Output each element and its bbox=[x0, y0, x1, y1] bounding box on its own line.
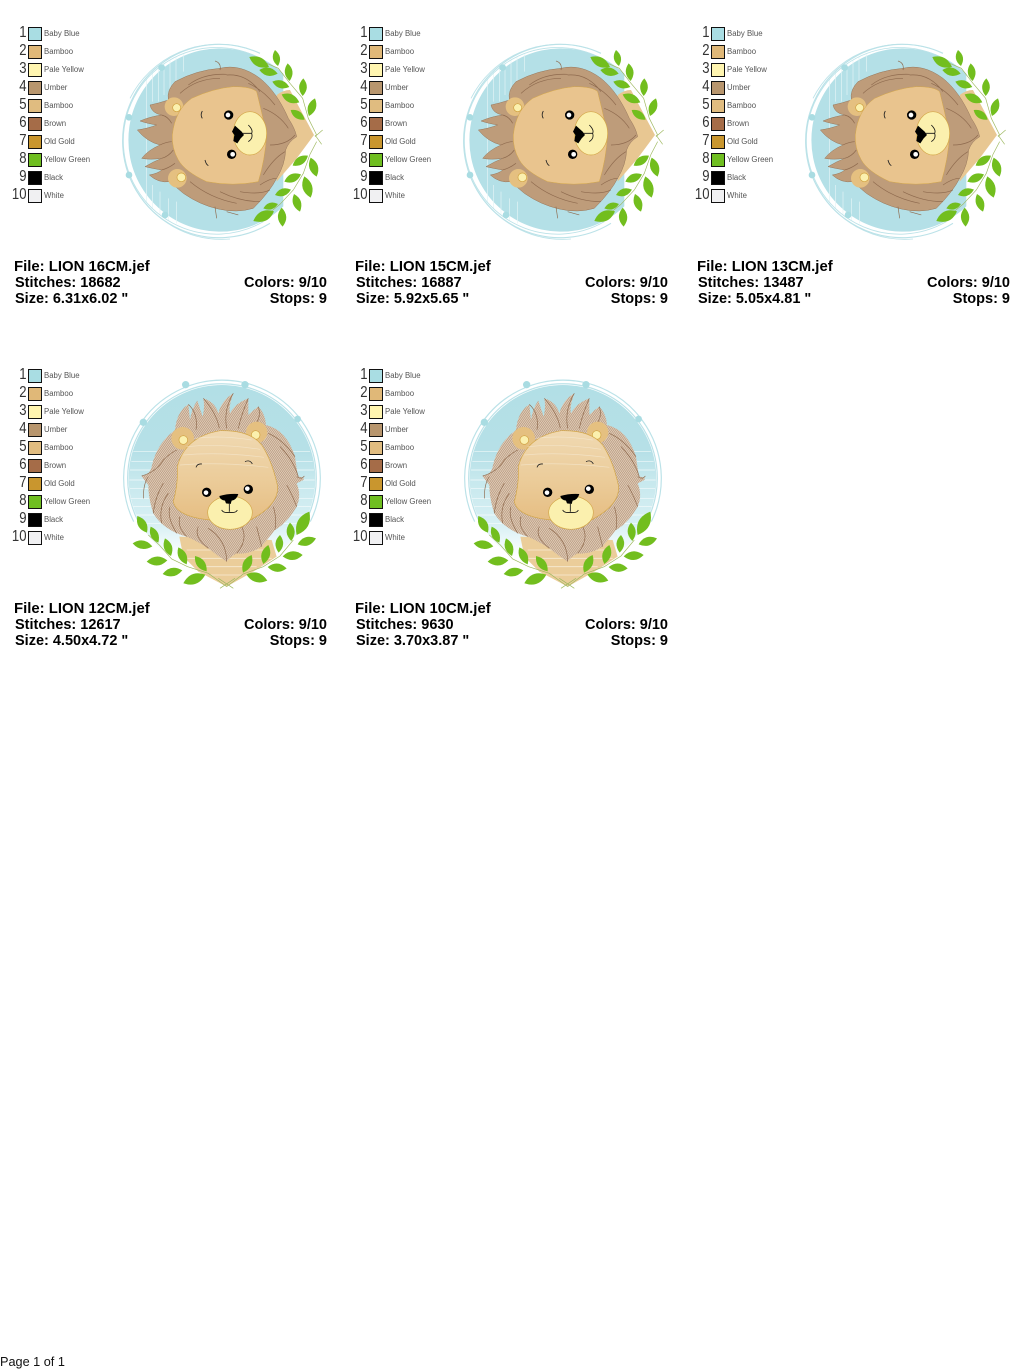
colour legend: Umber bbox=[727, 83, 750, 92]
colour legend: Black bbox=[727, 173, 746, 182]
colour legend: 9 bbox=[702, 168, 710, 185]
colour legend: Pale Yellow bbox=[385, 65, 425, 74]
lion embroidery, upright bbox=[123, 380, 321, 589]
colour legend: 8 bbox=[19, 150, 26, 167]
colour legend: Yellow Green bbox=[44, 497, 90, 506]
colour legend: Pale Yellow bbox=[44, 407, 84, 416]
colour legend: Brown bbox=[385, 461, 407, 470]
colour legend: Bamboo bbox=[44, 389, 73, 398]
file details: Size: 5.05x4.81 " bbox=[698, 291, 811, 307]
colour legend: White bbox=[727, 191, 747, 200]
colour legend: 9 bbox=[360, 168, 368, 185]
file details: Stops: 9 bbox=[270, 633, 327, 649]
colour legend: Bamboo bbox=[44, 47, 73, 56]
colour legend: Yellow Green bbox=[727, 155, 773, 164]
colour legend: 8 bbox=[702, 150, 710, 167]
file details: Colors: 9/10 bbox=[244, 275, 327, 291]
colour legend: 2 bbox=[360, 384, 368, 401]
file details: Colors: 9/10 bbox=[244, 617, 327, 633]
lion embroidery, rotated bbox=[805, 44, 1006, 240]
panel: LION 10CM bbox=[353, 366, 668, 649]
file details: File: LION 12CM.jef bbox=[14, 601, 150, 617]
file details: Size: 5.92x5.65 " bbox=[356, 291, 469, 307]
colour legend: Black bbox=[44, 515, 63, 524]
colour legend: 1 bbox=[19, 24, 26, 41]
colour legend: White bbox=[385, 191, 405, 200]
file details: File: LION 15CM.jef bbox=[355, 259, 491, 275]
colour legend bbox=[12, 24, 90, 203]
colour legend: Baby Blue bbox=[44, 29, 80, 38]
colour legend: 3 bbox=[19, 402, 26, 419]
colour legend: 4 bbox=[19, 78, 26, 95]
colour legend: 7 bbox=[702, 132, 710, 149]
colour legend: 3 bbox=[702, 60, 710, 77]
panel: LION 15CM bbox=[353, 24, 668, 307]
colour legend: 1 bbox=[360, 366, 368, 383]
colour legend: 10 bbox=[695, 186, 710, 203]
colour legend: 10 bbox=[12, 186, 26, 203]
file details bbox=[697, 259, 1010, 307]
colour legend: Black bbox=[385, 515, 404, 524]
colour legend: Baby Blue bbox=[727, 29, 763, 38]
colour legend: Baby Blue bbox=[385, 29, 421, 38]
colour legend: Bamboo bbox=[727, 101, 756, 110]
file details: File: LION 16CM.jef bbox=[14, 259, 150, 275]
colour legend bbox=[12, 366, 90, 545]
colour legend: 3 bbox=[19, 60, 26, 77]
colour legend: 6 bbox=[360, 114, 368, 131]
colour legend: Black bbox=[44, 173, 63, 182]
colour legend: 1 bbox=[702, 24, 710, 41]
colour legend: Baby Blue bbox=[44, 371, 80, 380]
colour legend: 8 bbox=[360, 150, 368, 167]
colour legend: Old Gold bbox=[385, 479, 416, 488]
colour legend: 5 bbox=[19, 96, 26, 113]
file details: Stops: 9 bbox=[611, 291, 668, 307]
colour legend: Black bbox=[385, 173, 404, 182]
colour legend: 2 bbox=[702, 42, 710, 59]
file details: Size: 4.50x4.72 " bbox=[15, 633, 128, 649]
colour legend: 8 bbox=[19, 492, 26, 509]
file details: Stitches: 13487 bbox=[698, 275, 804, 291]
colour legend: 9 bbox=[19, 510, 26, 527]
colour legend: 7 bbox=[19, 132, 26, 149]
file details: Colors: 9/10 bbox=[927, 275, 1010, 291]
colour legend: 5 bbox=[19, 438, 26, 455]
colour legend: 2 bbox=[360, 42, 368, 59]
colour legend: Umber bbox=[44, 83, 67, 92]
colour legend: 6 bbox=[19, 114, 26, 131]
colour legend: Yellow Green bbox=[44, 155, 90, 164]
file details: Stops: 9 bbox=[953, 291, 1010, 307]
colour legend: Umber bbox=[385, 83, 408, 92]
file details: Stitches: 18682 bbox=[15, 275, 121, 291]
file details: Size: 3.70x3.87 " bbox=[356, 633, 469, 649]
colour legend: 6 bbox=[360, 456, 368, 473]
colour legend: Old Gold bbox=[44, 137, 75, 146]
panel: LION 13CM bbox=[695, 24, 1010, 307]
colour legend: Umber bbox=[44, 425, 67, 434]
colour legend: 7 bbox=[360, 474, 368, 491]
colour legend: 5 bbox=[360, 438, 368, 455]
file details: Size: 6.31x6.02 " bbox=[15, 291, 128, 307]
colour legend: 4 bbox=[702, 78, 710, 95]
lion embroidery, rotated bbox=[122, 44, 323, 240]
colour legend: White bbox=[44, 191, 64, 200]
colour legend: 10 bbox=[353, 186, 368, 203]
colour legend: Pale Yellow bbox=[727, 65, 767, 74]
colour legend: Bamboo bbox=[385, 389, 414, 398]
colour legend: Yellow Green bbox=[385, 497, 431, 506]
colour legend: Old Gold bbox=[385, 137, 416, 146]
colour legend: 2 bbox=[19, 42, 26, 59]
colour legend: Bamboo bbox=[44, 101, 73, 110]
colour legend: 9 bbox=[360, 510, 368, 527]
colour legend: 10 bbox=[353, 528, 368, 545]
colour legend: Bamboo bbox=[385, 443, 414, 452]
colour legend: 5 bbox=[360, 96, 368, 113]
colour legend: Brown bbox=[44, 119, 66, 128]
colour legend: 7 bbox=[19, 474, 26, 491]
colour legend: White bbox=[385, 533, 405, 542]
colour legend: 8 bbox=[360, 492, 368, 509]
colour legend: 6 bbox=[702, 114, 710, 131]
colour legend bbox=[353, 366, 431, 545]
lion embroidery, upright bbox=[464, 380, 662, 589]
file details: Colors: 9/10 bbox=[585, 275, 668, 291]
page footer: Page 1 of 1 bbox=[0, 1355, 65, 1369]
colour legend: 5 bbox=[702, 96, 710, 113]
colour legend: 4 bbox=[360, 78, 368, 95]
colour legend: White bbox=[44, 533, 64, 542]
colour legend: 1 bbox=[360, 24, 368, 41]
colour legend: Pale Yellow bbox=[385, 407, 425, 416]
colour legend: 3 bbox=[360, 402, 368, 419]
colour legend: Yellow Green bbox=[385, 155, 431, 164]
colour legend: Brown bbox=[385, 119, 407, 128]
panel: LION 16CM bbox=[12, 24, 327, 307]
colour legend: Bamboo bbox=[44, 443, 73, 452]
file details: Stitches: 9630 bbox=[356, 617, 454, 633]
file details bbox=[355, 259, 668, 307]
colour legend bbox=[695, 24, 773, 203]
file details: File: LION 13CM.jef bbox=[697, 259, 833, 275]
colour legend: Bamboo bbox=[385, 47, 414, 56]
colour legend: 7 bbox=[360, 132, 368, 149]
colour legend: Brown bbox=[44, 461, 66, 470]
colour legend: Pale Yellow bbox=[44, 65, 84, 74]
file details: Colors: 9/10 bbox=[585, 617, 668, 633]
colour legend: Bamboo bbox=[385, 101, 414, 110]
file details: Stops: 9 bbox=[611, 633, 668, 649]
colour legend: Umber bbox=[385, 425, 408, 434]
colour legend: Old Gold bbox=[44, 479, 75, 488]
file details: File: LION 10CM.jef bbox=[355, 601, 491, 617]
file details bbox=[355, 601, 668, 649]
file details: Stitches: 16887 bbox=[356, 275, 462, 291]
colour legend: Bamboo bbox=[727, 47, 756, 56]
colour legend: 4 bbox=[19, 420, 26, 437]
colour legend: 4 bbox=[360, 420, 368, 437]
panel: LION 12CM bbox=[12, 366, 327, 649]
file details: Stitches: 12617 bbox=[15, 617, 121, 633]
file details bbox=[14, 601, 327, 649]
colour legend: Old Gold bbox=[727, 137, 758, 146]
colour legend: Brown bbox=[727, 119, 749, 128]
file details: Stops: 9 bbox=[270, 291, 327, 307]
colour legend: 1 bbox=[19, 366, 26, 383]
colour legend: 3 bbox=[360, 60, 368, 77]
file details bbox=[14, 259, 327, 307]
colour legend: Baby Blue bbox=[385, 371, 421, 380]
colour legend: 2 bbox=[19, 384, 26, 401]
colour legend: 9 bbox=[19, 168, 26, 185]
colour legend bbox=[353, 24, 431, 203]
lion embroidery, rotated bbox=[463, 44, 664, 240]
colour legend: 6 bbox=[19, 456, 26, 473]
colour legend: 10 bbox=[12, 528, 26, 545]
